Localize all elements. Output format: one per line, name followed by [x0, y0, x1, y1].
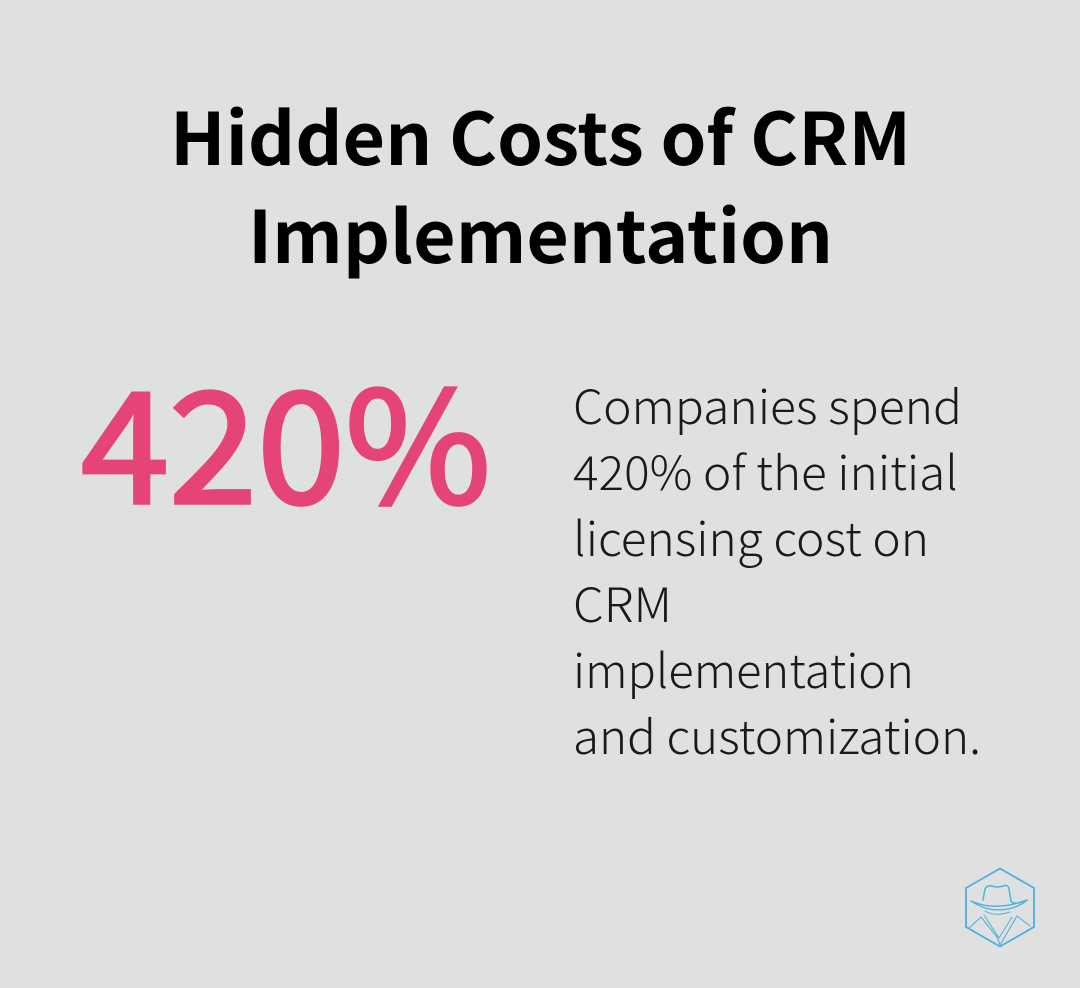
description text: licensing cost on: [573, 501, 929, 570]
icon: hexagon logo with hat-wearing spy: [966, 868, 1034, 946]
title: Hidden Costs of CRM: [170, 81, 911, 186]
big stat: 420%: 420%: [81, 325, 491, 548]
description text: Companies spend: [573, 369, 962, 438]
title: Implementation: [248, 179, 833, 284]
description text: 420% of the initial: [573, 435, 958, 504]
title: [170, 81, 911, 284]
description text: and customization.: [573, 699, 981, 768]
description text: [573, 369, 981, 768]
description text: implementation: [573, 633, 914, 702]
description text: CRM: [573, 567, 672, 636]
